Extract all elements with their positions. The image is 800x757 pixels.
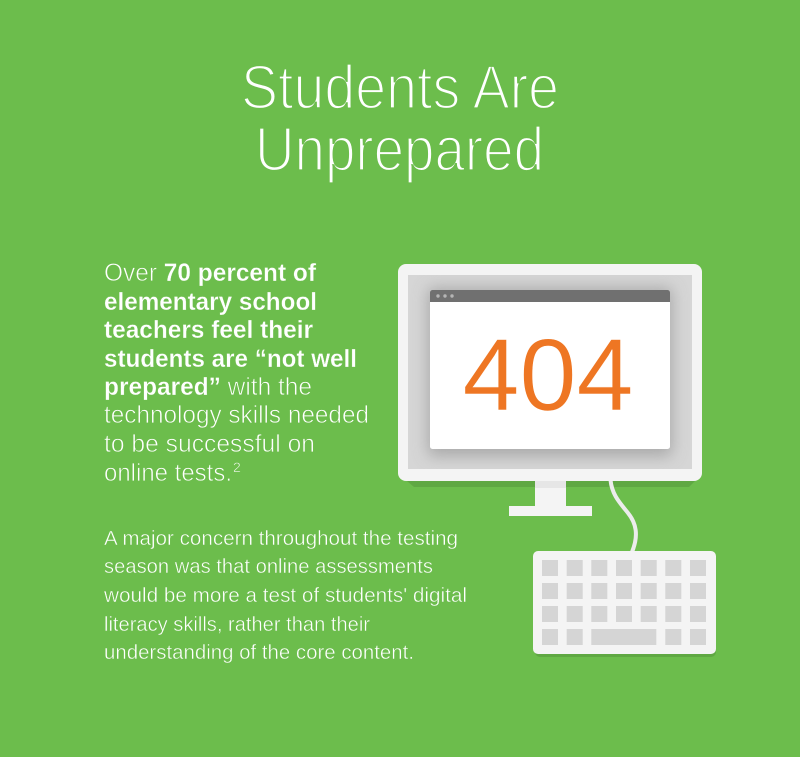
keyboard body (533, 551, 716, 654)
keyboard keys (542, 560, 706, 645)
monitor stand (509, 481, 592, 516)
text block: 70 percent statistic: 2 (233, 459, 241, 475)
404 error text: 404 (462, 318, 634, 432)
title: Students Are (241, 54, 559, 122)
text block: 70 percent statistic: prepared” with the (104, 373, 312, 401)
text block: 70 percent statistic: to be successful on (104, 430, 315, 458)
keyboard shadow (535, 553, 716, 657)
text block: digital literacy concern: literacy skills, rather than their (104, 613, 370, 636)
screen shadow (428, 288, 672, 456)
text block: 70 percent statistic (104, 259, 369, 487)
text block: 70 percent statistic: technology skills needed (104, 401, 369, 429)
text block: digital literacy concern: would be more a test of students' digital (103, 584, 467, 607)
browser title bar (430, 290, 670, 302)
browser window (430, 290, 670, 449)
text block: 70 percent statistic: teachers feel their (104, 316, 313, 344)
icon: keyboard (533, 551, 716, 657)
text block: digital literacy concern (103, 527, 467, 664)
monitor cable (610, 480, 636, 552)
monitor frame (398, 264, 702, 481)
text block: 70 percent statistic: students are “not well (104, 345, 357, 373)
text block: digital literacy concern: season was that online assessments (104, 555, 433, 578)
title: Unprepared (255, 116, 544, 184)
monitor bezel (408, 275, 692, 469)
text block: digital literacy concern: understanding of the core content. (104, 641, 414, 664)
text block: 70 percent statistic: elementary school (104, 288, 317, 316)
title (241, 54, 559, 184)
text block: 70 percent statistic: online tests. (104, 459, 232, 487)
icon: monitor (398, 264, 702, 552)
text block: digital literacy concern: A major concern throughout the testing (104, 527, 458, 550)
monitor shadow (407, 481, 695, 487)
text block: 70 percent statistic: Over 70 percent of (104, 259, 317, 287)
browser dots (436, 294, 454, 298)
